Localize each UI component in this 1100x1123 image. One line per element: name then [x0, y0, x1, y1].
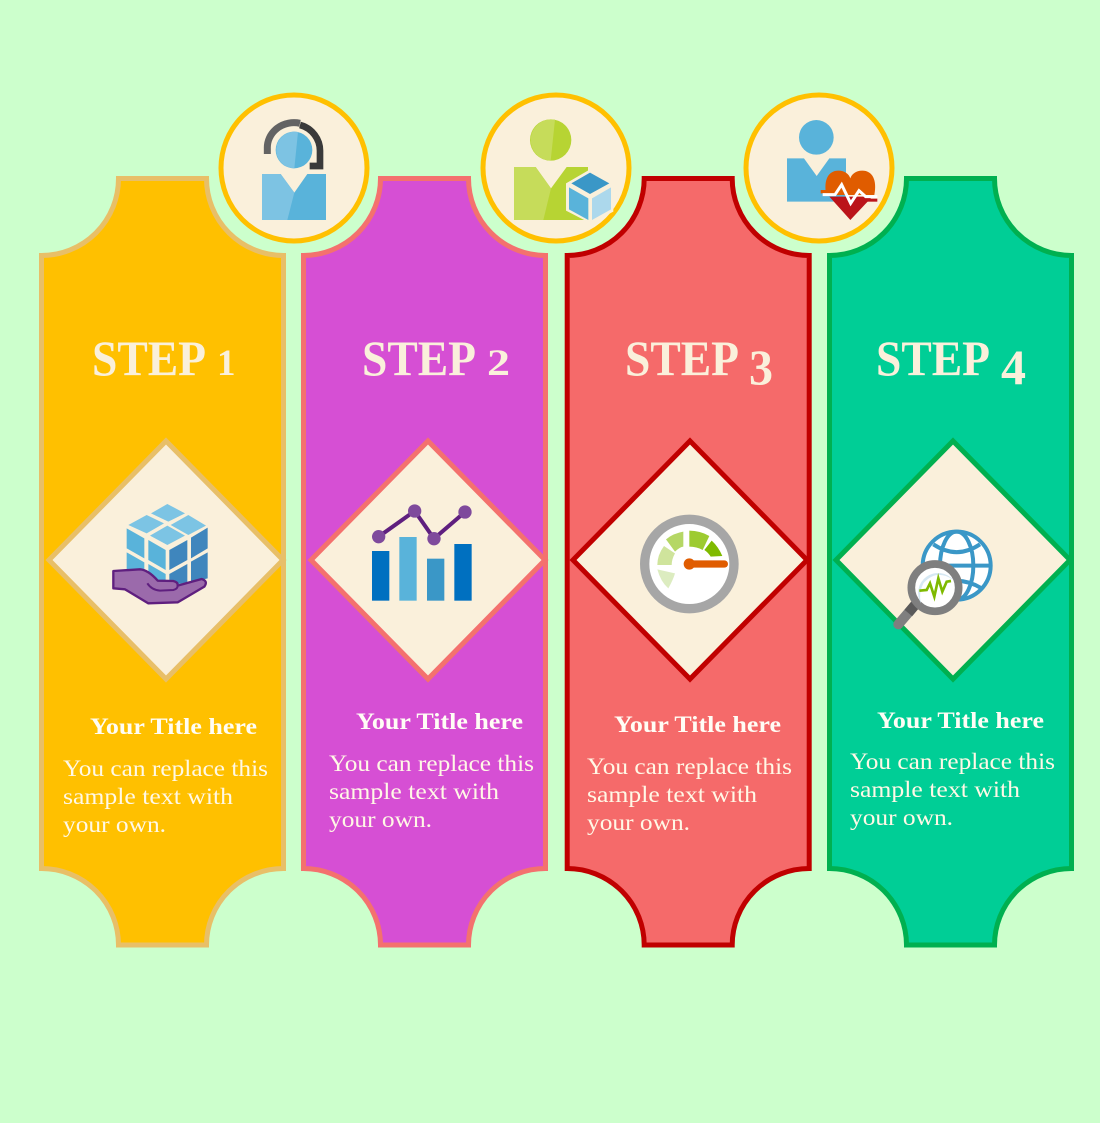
text: step 2 body: You can replace this [329, 751, 534, 777]
heading: step 2: 2 [487, 343, 510, 384]
heading: step 3: STEP [625, 330, 739, 386]
icon: bar and line chart [372, 504, 472, 601]
text: step 4 body: sample text with [850, 777, 1020, 803]
panel shape: step 3 [567, 178, 809, 945]
icon: support agent in circle [221, 95, 367, 241]
panel: step 1 [42, 95, 367, 945]
panel: step 3 [567, 95, 892, 945]
text: step 4 body: your own. [850, 805, 953, 831]
heading: step 2: STEP [362, 330, 476, 386]
panel shape: step 2 [304, 178, 546, 945]
text: step 3 body: your own. [587, 810, 690, 836]
text: step 2 title: Your Title here [356, 709, 523, 734]
text: step 4 title: Your Title here [877, 708, 1044, 733]
text: step 2 body: sample text with [329, 779, 499, 805]
panel: step 2 [304, 95, 629, 945]
heading: step 4: STEP [876, 330, 990, 386]
diamond: step 3 [573, 441, 807, 679]
text: step 3 body: You can replace this [587, 754, 792, 780]
text: step 1 body [63, 756, 268, 838]
panel shape: step 4 [830, 178, 1072, 945]
text: step 3 title: Your Title here [614, 712, 781, 737]
icon: person with box in circle [483, 95, 629, 241]
panel shape: step 1 [42, 178, 284, 945]
text: step 4 body [850, 749, 1055, 831]
heading: step 4: 4 [1001, 339, 1026, 395]
diamond: step 4 [836, 441, 1070, 679]
diamond: step 2 [311, 441, 545, 679]
heading: step 3: 3 [749, 339, 773, 395]
panel: step 4 [830, 178, 1072, 945]
heading: step 1: 1 [217, 343, 236, 384]
text: step 2 body [329, 751, 534, 833]
text: step 3 body: sample text with [587, 782, 757, 808]
text: step 1 body: sample text with [63, 784, 233, 810]
icon: speedometer gauge [645, 519, 734, 609]
text: step 3 body [587, 754, 792, 836]
text: step 4 body: You can replace this [850, 749, 1055, 775]
diamond: step 1 [49, 441, 283, 679]
text: step 1 title: Your Title here [90, 714, 257, 739]
icon: person with heart in circle [746, 95, 892, 241]
text: step 1 body: You can replace this [63, 756, 268, 782]
text: step 2 body: your own. [329, 807, 432, 833]
heading: step 1: STEP [92, 330, 206, 386]
icon: globe and magnifier [898, 532, 991, 624]
text: step 1 body: your own. [63, 812, 166, 838]
icon: cube in hand [113, 504, 208, 603]
